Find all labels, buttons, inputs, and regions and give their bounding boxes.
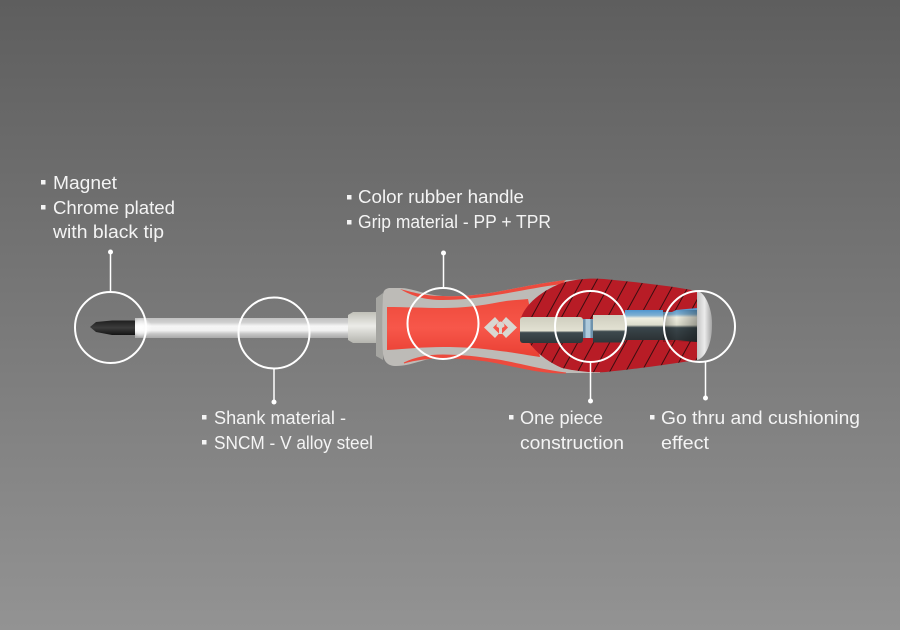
text: construction: One piece <box>520 408 603 428</box>
collar flange <box>376 293 383 360</box>
text: handle: Color rubber handle <box>358 187 524 207</box>
handle <box>376 278 741 373</box>
red grip centre <box>387 299 540 357</box>
text: magnet and chrome tip: Chrome plated <box>53 198 175 218</box>
text: magnet and chrome tip: with black tip <box>52 222 164 242</box>
callout ring: end cap <box>664 291 735 400</box>
text: handle: Grip material - PP + TPR <box>358 212 551 232</box>
text: magnet and chrome tip <box>41 173 175 242</box>
end cap <box>697 291 712 360</box>
text: shank <box>202 408 373 453</box>
brand logo <box>484 317 517 338</box>
callout ring: tip <box>75 250 146 363</box>
callout ring: shank <box>238 298 310 404</box>
translucent grey outer body <box>382 279 600 373</box>
text: construction <box>509 408 624 453</box>
shank <box>130 318 350 338</box>
text: shank: Shank material - <box>214 408 346 428</box>
hex collar <box>348 312 376 343</box>
black tip <box>90 320 135 335</box>
diagonal grip hatching <box>530 278 697 372</box>
callout ring: one piece construction <box>555 291 626 404</box>
steel core <box>520 308 697 343</box>
text: handle <box>347 187 551 232</box>
text: cushioning: Go thru and cushioning <box>661 408 860 428</box>
red outer edge bottom <box>404 355 566 373</box>
dark red grip panel <box>520 279 697 372</box>
red outer edge top <box>400 280 566 300</box>
screwdriver <box>90 278 741 373</box>
text: shank: SNCM - V alloy steel <box>214 433 373 453</box>
text: magnet and chrome tip: Magnet <box>53 173 117 193</box>
text: construction: construction <box>520 433 624 453</box>
callout ring: handle <box>408 250 478 359</box>
text: cushioning <box>650 408 860 453</box>
text: cushioning: effect <box>661 433 709 453</box>
